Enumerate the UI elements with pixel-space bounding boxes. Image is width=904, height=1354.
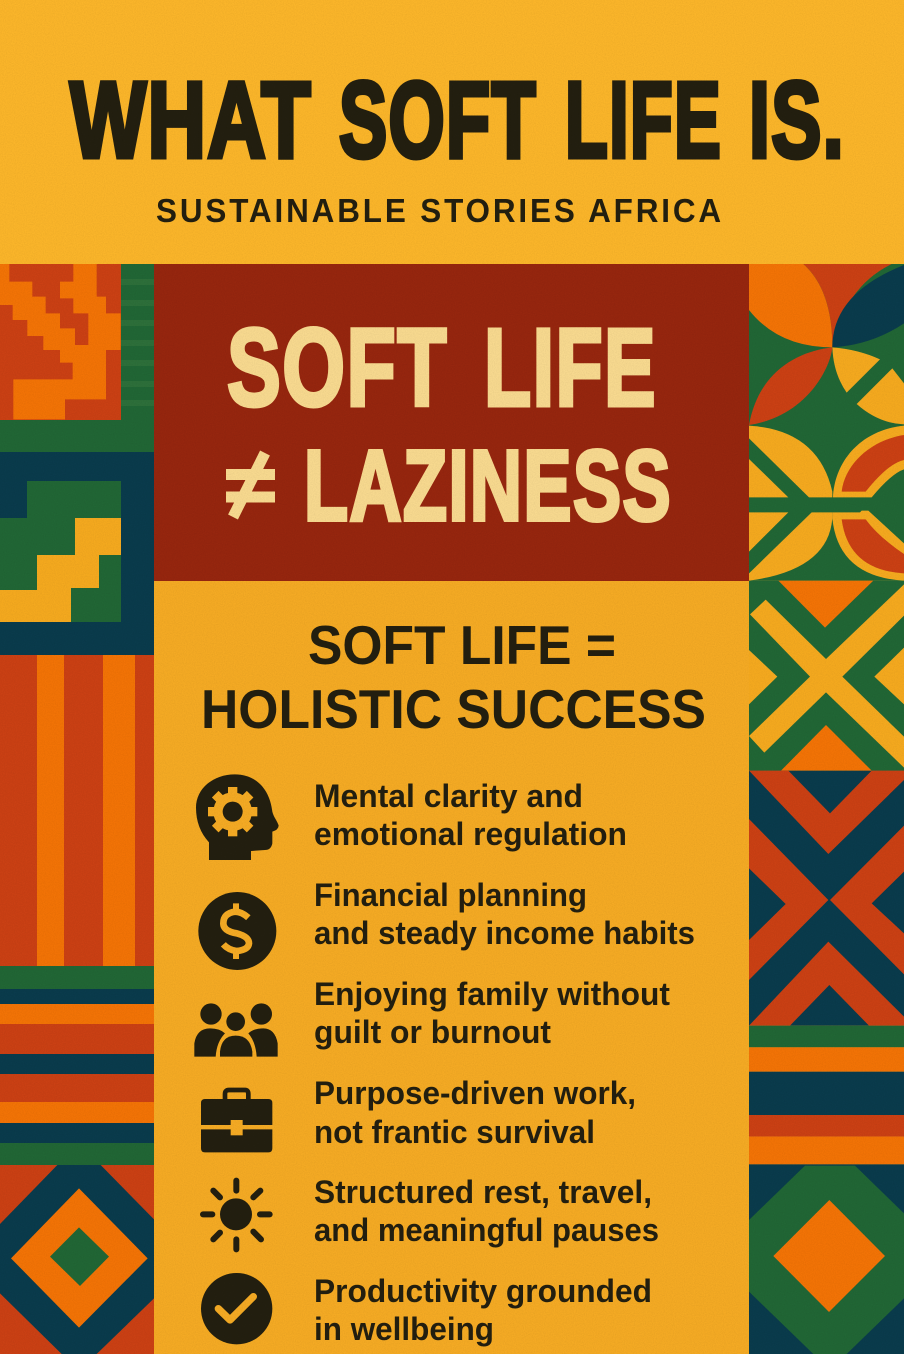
heading: holistic success: HOLISTIC SUCCESS bbox=[201, 678, 706, 740]
item text: productivity: Productivity grounded bbox=[314, 1273, 652, 1309]
item text: enjoying family bbox=[314, 976, 670, 1050]
icon: head with gear bbox=[196, 774, 279, 860]
icon: not equal sign bbox=[226, 453, 275, 517]
item text: structured rest: Structured rest, travel, bbox=[314, 1174, 652, 1210]
item text: mental clarity: Mental clarity and bbox=[314, 778, 583, 814]
item text: structured rest bbox=[314, 1174, 659, 1248]
heading: soft life: LIFE bbox=[484, 306, 657, 430]
heading: soft life: SOFT bbox=[227, 306, 448, 430]
title: IS. bbox=[749, 59, 845, 180]
header band bbox=[0, 0, 904, 264]
item text: mental clarity: emotional regulation bbox=[314, 816, 627, 852]
pattern: red X on navy bbox=[749, 771, 904, 1026]
panel: holistic success bbox=[154, 581, 749, 1354]
item text: financial planning bbox=[314, 877, 695, 951]
item text: financial planning: Financial planning bbox=[314, 877, 587, 913]
pattern: concentric diamond bbox=[0, 1165, 154, 1354]
panel: soft life is not laziness bbox=[154, 264, 749, 581]
title: WHAT bbox=[70, 59, 312, 180]
pattern: petals and arcs bbox=[749, 264, 904, 581]
heading: not equal laziness bbox=[226, 430, 672, 542]
pattern: stepped orange and red kente bbox=[0, 264, 154, 452]
title: LIFE bbox=[565, 59, 722, 180]
item text: mental clarity bbox=[314, 778, 627, 852]
title bbox=[70, 59, 845, 180]
item text: purpose-driven work: Purpose-driven work, bbox=[314, 1075, 636, 1111]
heading: soft life equals: SOFT LIFE = bbox=[308, 614, 616, 676]
pattern: horizontal stripes bbox=[0, 966, 154, 1165]
title: SOFT bbox=[339, 59, 537, 180]
item text: enjoying family: Enjoying family without bbox=[314, 976, 670, 1012]
item text: purpose-driven work: not frantic survival bbox=[314, 1114, 595, 1150]
subtitle: SUSTAINABLE STORIES AFRICA bbox=[156, 192, 724, 229]
item text: productivity bbox=[314, 1273, 652, 1347]
pattern: yellow X on green bbox=[749, 581, 904, 771]
heading text: laziness: LAZINESS bbox=[304, 430, 672, 542]
icon: sun bbox=[203, 1181, 270, 1249]
icon: check circle bbox=[201, 1273, 272, 1344]
right pattern column bbox=[749, 264, 904, 1354]
item text: structured rest: and meaningful pauses bbox=[314, 1212, 659, 1248]
pattern: horizontal stripes and diamond bbox=[749, 1026, 904, 1354]
icon: dollar coin bbox=[198, 892, 276, 970]
icon: briefcase bbox=[201, 1090, 272, 1152]
item text: purpose-driven work bbox=[314, 1075, 636, 1150]
item text: financial planning: and steady income habits bbox=[314, 915, 695, 951]
pattern: stepped navy green yellow bbox=[0, 452, 154, 655]
pattern: vertical stripes bbox=[0, 655, 154, 966]
item text: productivity: in wellbeing bbox=[314, 1311, 494, 1347]
item text: enjoying family: guilt or burnout bbox=[314, 1014, 551, 1050]
left pattern column bbox=[0, 264, 154, 1354]
icon: family group bbox=[194, 1003, 278, 1057]
